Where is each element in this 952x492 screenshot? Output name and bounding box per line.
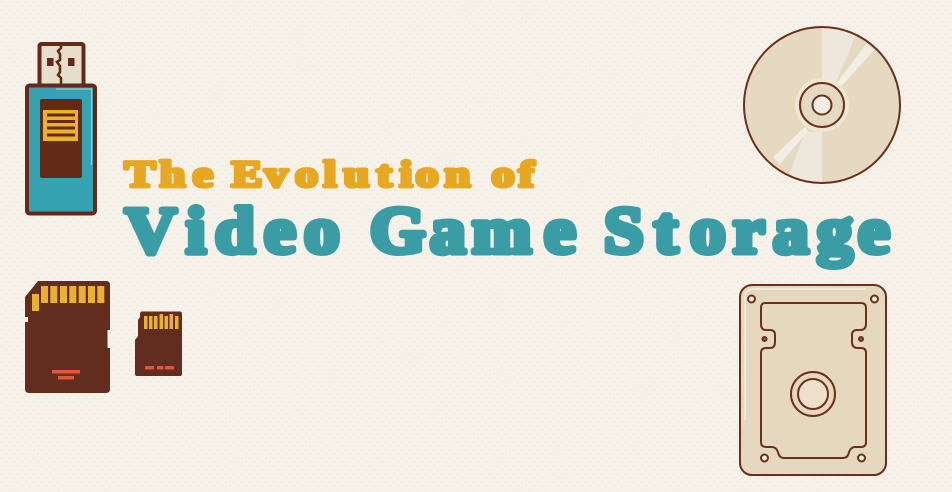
icon: hard drive (740, 285, 886, 475)
icon: microSD card (135, 312, 182, 376)
icon: compact disc (744, 27, 900, 183)
heading: Video Game Storage: Video Game Storage (125, 194, 890, 267)
heading: The Evolution of: The Evolution of (124, 155, 535, 195)
icon: SD card (25, 281, 110, 393)
icon: USB flash drive (27, 44, 95, 214)
